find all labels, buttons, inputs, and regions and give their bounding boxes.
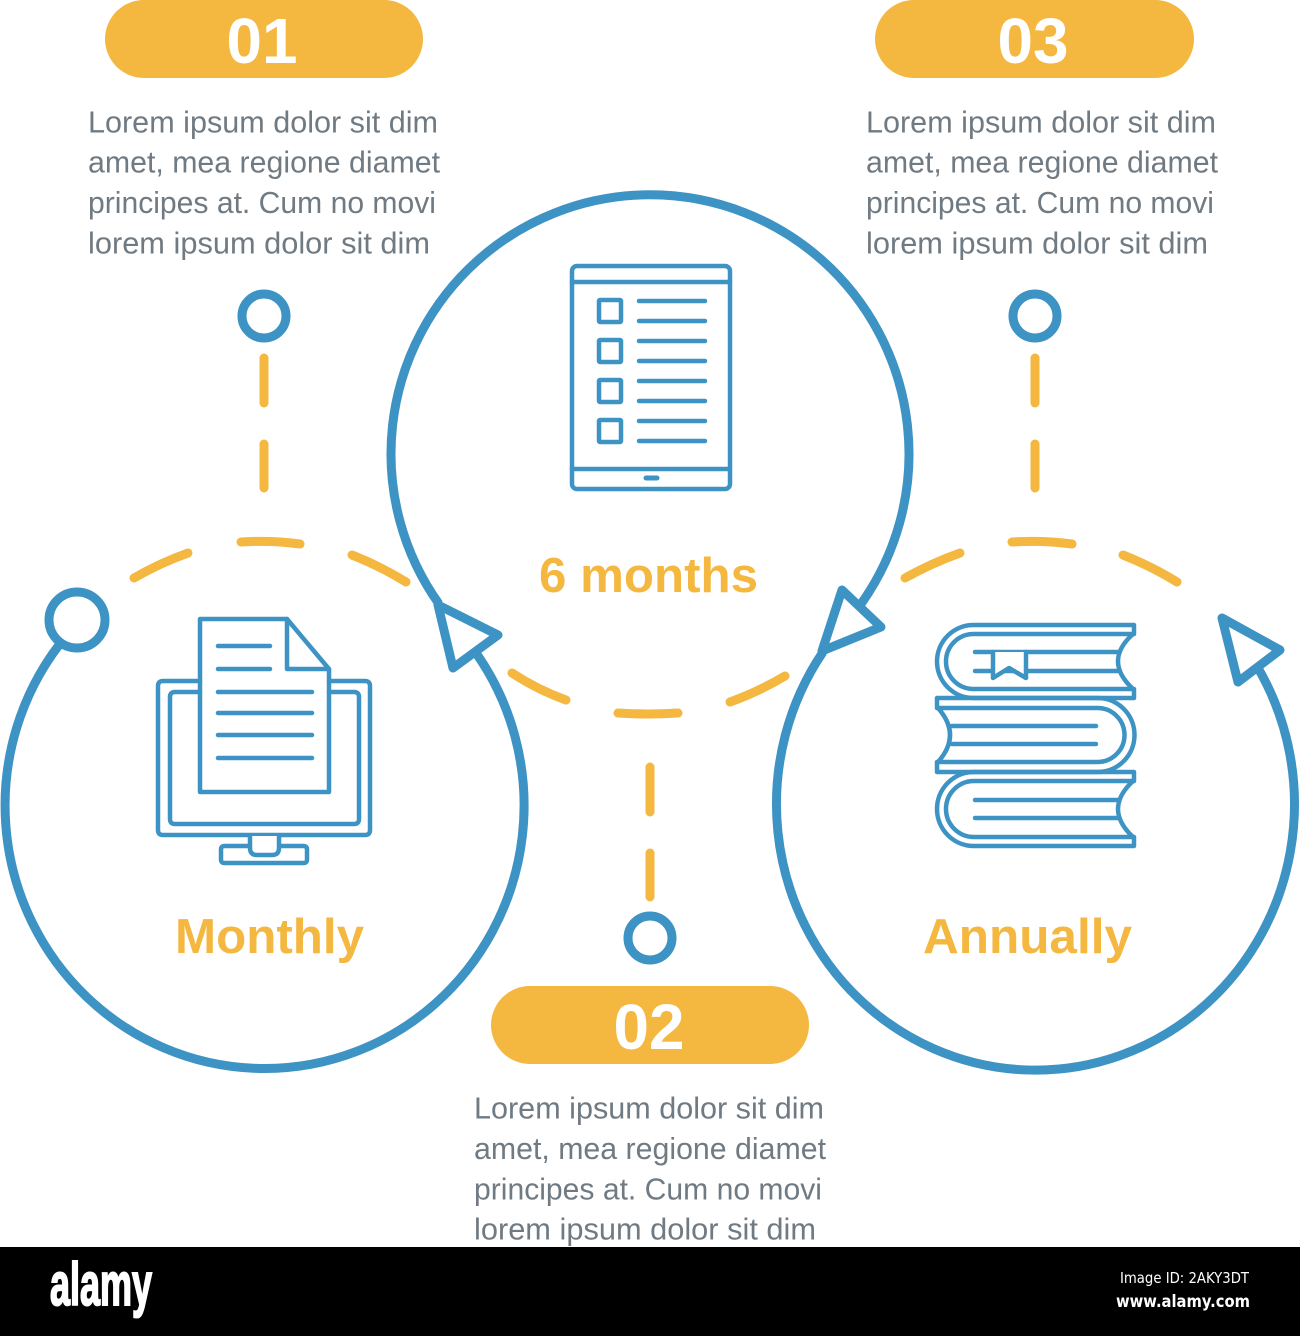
- text block: step 3: [866, 104, 1218, 260]
- text block: step 2: Lorem ipsum dolor sit dim: [474, 1090, 824, 1126]
- watermark bar: www.alamy.com: [1116, 1292, 1250, 1312]
- panel: step 3 circle with arrow: [776, 618, 1294, 1070]
- icon: stack of books: [937, 625, 1134, 846]
- text block: step 1: Lorem ipsum dolor sit dim: [88, 104, 438, 140]
- text block: step 2: amet, mea regione diamet: [474, 1131, 826, 1166]
- text block: step 3: Lorem ipsum dolor sit dim: [866, 104, 1216, 140]
- text block: step 3: lorem ipsum dolor sit dim: [866, 226, 1208, 260]
- badge: 03: 03: [998, 5, 1068, 77]
- badge: 03: [875, 0, 1194, 78]
- watermark bar: [0, 1247, 1300, 1336]
- connector: step 1: [242, 294, 286, 488]
- label: Monthly: Monthly: [175, 910, 364, 964]
- text block: step 3: amet, mea regione diamet: [866, 144, 1218, 180]
- panel: step 1 circle with arrow: [5, 592, 524, 1068]
- watermark bar: alamy: [50, 1251, 152, 1318]
- dashed arc: step 3: [905, 541, 1177, 582]
- text block: step 1: lorem ipsum dolor sit dim: [88, 226, 430, 260]
- text block: step 1: principes at. Cum no movi: [88, 185, 436, 220]
- badge: 02: 02: [614, 991, 684, 1063]
- watermark bar: Image ID: 2AKY3DT: [1120, 1269, 1250, 1287]
- icon: document on monitor: [158, 619, 370, 863]
- panel: step 2 circle with arrow: [391, 195, 909, 651]
- badge: 02: [491, 986, 809, 1064]
- text block: step 2: lorem ipsum dolor sit dim: [474, 1212, 816, 1246]
- text block: step 1: amet, mea regione diamet: [88, 144, 440, 180]
- badge: 01: [105, 0, 423, 78]
- connector: step 2: [628, 767, 672, 960]
- text block: step 3: principes at. Cum no movi: [866, 185, 1214, 220]
- icon: tablet checklist: [572, 266, 730, 489]
- badge: 01: 01: [226, 5, 298, 77]
- connector: step 3: [1013, 294, 1057, 488]
- text block: step 2: [474, 1090, 826, 1246]
- label: 6 months: 6 months: [539, 549, 758, 603]
- dashed arc: step 1: [134, 541, 406, 582]
- text block: step 1: [88, 104, 440, 260]
- label: Annually: Annually: [923, 910, 1132, 964]
- dashed arc: step 2: [512, 673, 785, 714]
- text block: step 2: principes at. Cum no movi: [474, 1172, 822, 1206]
